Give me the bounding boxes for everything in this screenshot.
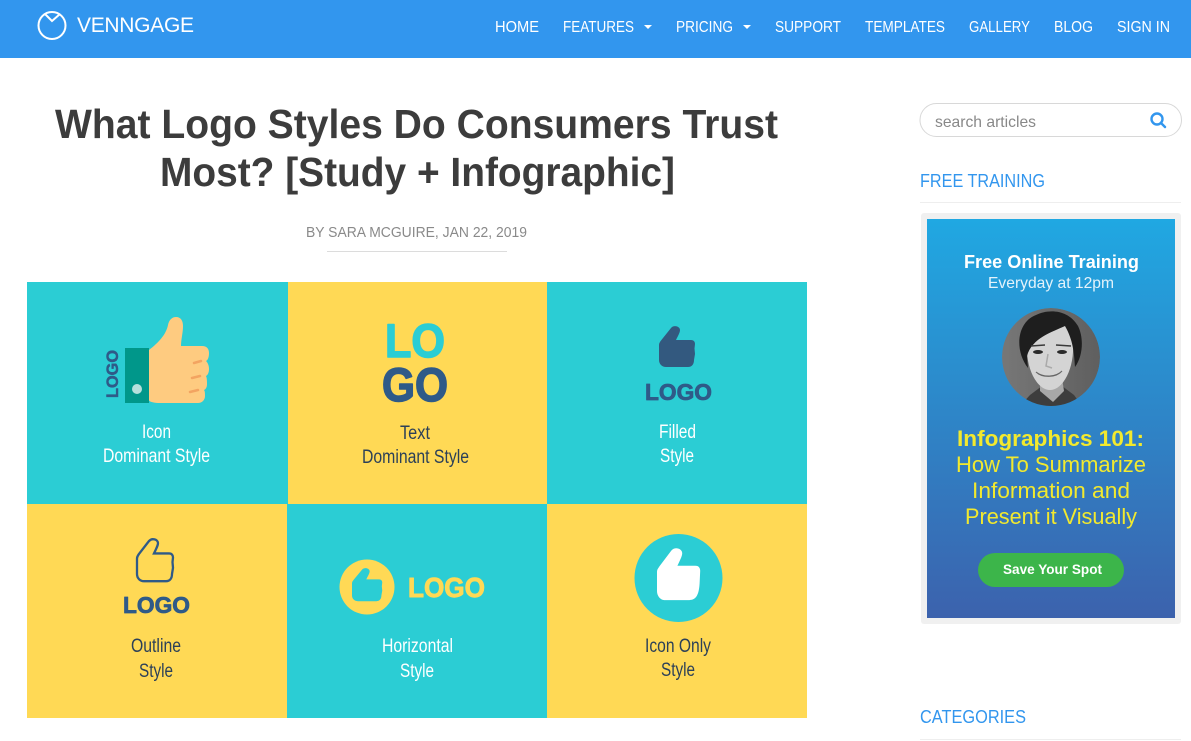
cell: filled style: LOGO — [645, 379, 712, 405]
cell: icon dominant style — [103, 317, 210, 467]
cell: icon dominant style: LOGO — [103, 350, 122, 398]
panel: training promo — [921, 213, 1181, 624]
navigation links: SUPPORT — [775, 19, 841, 36]
navigation links: GALLERY — [969, 19, 1030, 36]
cell: filled style — [645, 326, 712, 467]
cell: outline style: LOGO — [123, 592, 190, 618]
navigation links: TEMPLATES — [865, 19, 945, 36]
navigation links: PRICING — [676, 19, 733, 36]
cell: text dominant style: LO — [385, 314, 445, 367]
cell: text dominant style: Text — [400, 423, 431, 444]
cell: outline style: Outline — [131, 636, 181, 657]
cell: icon dominant style: Dominant Style — [103, 446, 210, 467]
promo course title: Infographics 101: — [957, 426, 1144, 451]
navigation links: BLOG — [1054, 19, 1093, 36]
cell: horizontal style — [340, 560, 485, 682]
cell: outline style: Style — [139, 661, 173, 682]
promo course title — [956, 426, 1146, 529]
cell: icon only style: Icon Only — [645, 636, 711, 657]
search box — [920, 104, 1182, 136]
search box: search articles — [935, 114, 1036, 131]
navigation links — [495, 19, 1170, 36]
logo styles grid — [27, 282, 807, 718]
navigation links: HOME — [495, 19, 539, 36]
brand name: VENNGAGE — [77, 14, 194, 37]
promo course title: How To Summarize — [956, 452, 1146, 477]
cell: outline style — [123, 539, 190, 682]
promo heading: Free Online Training — [964, 252, 1139, 272]
byline: BY SARA MCGUIRE, JAN 22, 2019 — [306, 225, 527, 241]
promo schedule: Everyday at 12pm — [988, 275, 1114, 292]
cell: text dominant style: GO — [382, 358, 448, 411]
navigation bar — [0, 0, 1191, 58]
portrait — [1002, 308, 1100, 406]
cell: horizontal style: Style — [400, 661, 434, 682]
icon: venngage logo — [38, 12, 66, 39]
cell: horizontal style: LOGO — [408, 572, 485, 603]
article title — [55, 101, 778, 195]
heading: free training: FREE TRAINING — [920, 171, 1045, 191]
icon: magnifier — [1152, 114, 1165, 127]
promo course title: Present it Visually — [965, 504, 1137, 529]
cell: text dominant style — [362, 314, 469, 468]
cell: filled style: Filled — [659, 422, 696, 443]
cell: icon only style: Style — [661, 660, 695, 681]
cell: icon dominant style: Icon — [142, 422, 171, 443]
button: save your spot — [978, 553, 1124, 587]
cell: icon only style — [634, 534, 722, 681]
button: save your spot: Save Your Spot — [1003, 561, 1102, 577]
article title: Most? [Study + Infographic] — [160, 149, 675, 195]
navigation links: SIGN IN — [1117, 19, 1170, 36]
cell: filled style: Style — [660, 446, 694, 467]
navigation links: FEATURES — [563, 19, 634, 36]
article title: What Logo Styles Do Consumers Trust — [55, 101, 778, 147]
cell: horizontal style: Horizontal — [382, 636, 453, 657]
promo course title: Information and — [972, 478, 1130, 503]
heading: categories: CATEGORIES — [920, 707, 1026, 727]
cell: text dominant style: Dominant Style — [362, 447, 469, 468]
